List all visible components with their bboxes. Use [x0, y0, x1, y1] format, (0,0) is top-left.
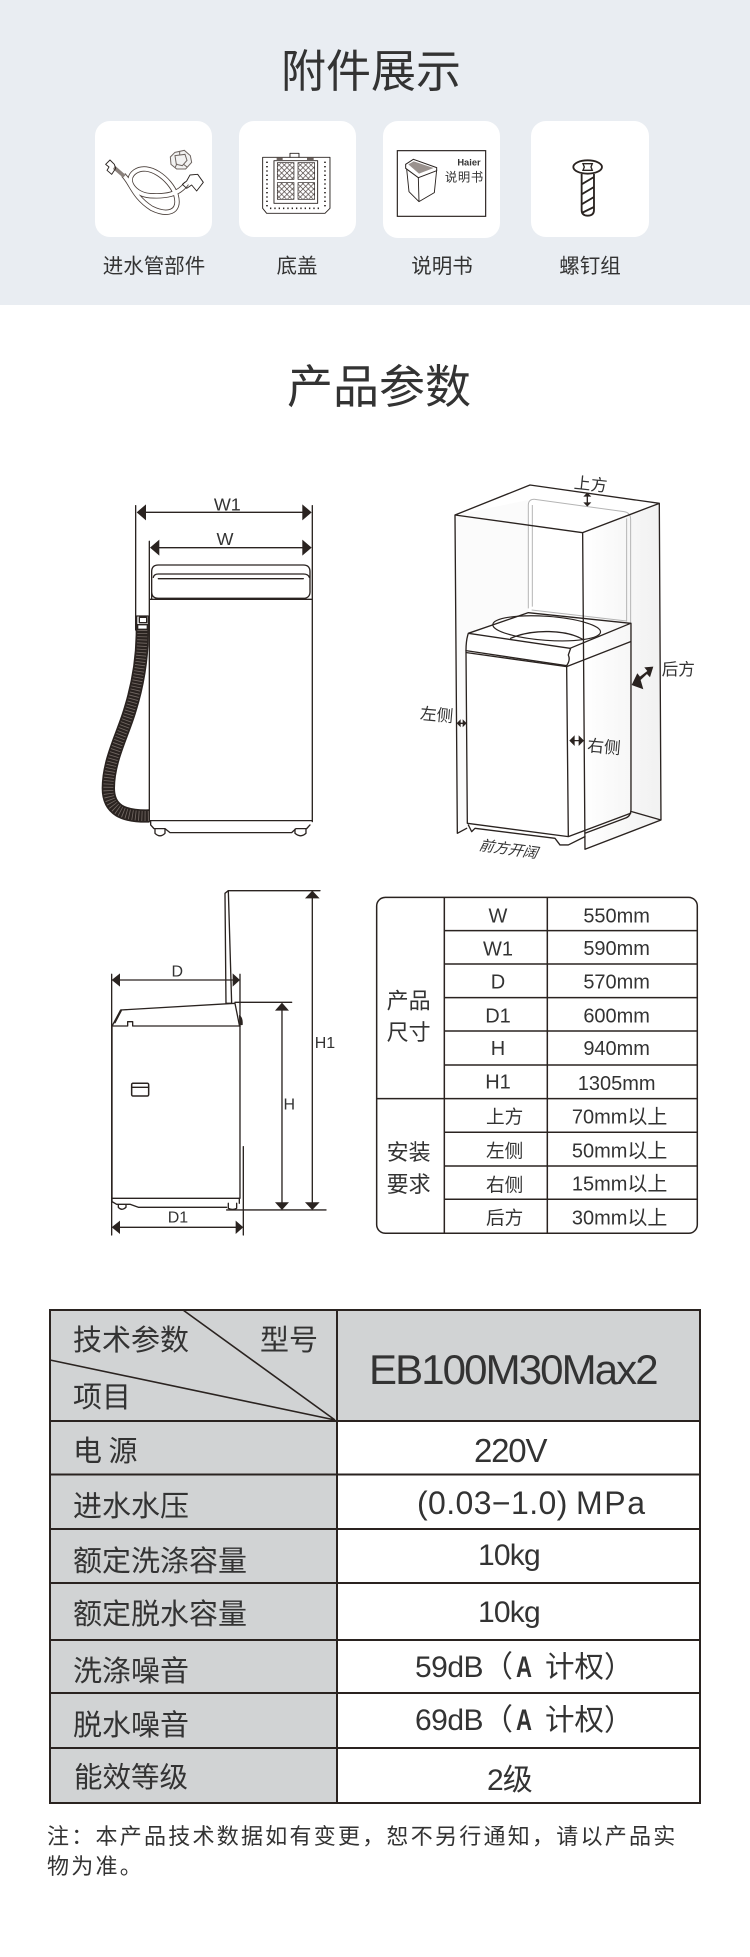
panel: accessories background — [0, 0, 750, 305]
header: model: 型号 — [260, 1317, 318, 1359]
note: 注：本产品技术数据如有变更，恕不另行通知，请以产品实 — [47, 1819, 678, 1851]
rows: keys: 右侧 — [486, 1170, 523, 1197]
row: power: 电 源 — [73, 1428, 138, 1470]
row: spin noise — [73, 1695, 634, 1744]
text: left clearance: 左侧 — [419, 700, 454, 727]
row: power — [73, 1428, 547, 1470]
rows: values: 15mm以上 — [572, 1173, 667, 1196]
row: water pressure: 进水水压 — [73, 1483, 189, 1525]
row: spin noise: 计权） — [545, 1697, 634, 1739]
text: H: H — [284, 1096, 295, 1113]
row: energy grade: 能效等级 — [74, 1755, 188, 1796]
rows: keys: 左侧 — [486, 1136, 523, 1163]
text: rear clearance: 后方 — [662, 656, 695, 680]
rows: keys: H — [491, 1038, 505, 1060]
diagram: installation clearance perspective — [419, 469, 695, 863]
row: wash noise: （ — [483, 1642, 513, 1686]
icon: bottom cover — [263, 153, 330, 213]
row: water pressure — [73, 1483, 647, 1525]
label: screw set: 螺钉组 — [559, 249, 621, 279]
rows: values: 550mm — [583, 906, 650, 928]
row: wash noise: 洗涤噪音 — [73, 1648, 189, 1690]
icon: manual — [397, 151, 486, 216]
rows: keys: 后方 — [486, 1204, 523, 1231]
rows: keys: 上方 — [486, 1103, 523, 1130]
row: wash noise — [73, 1642, 634, 1690]
group label: product size: 产品 — [387, 983, 431, 1015]
label: bottom cover: 底盖 — [276, 249, 318, 279]
icon: screw — [573, 160, 602, 216]
diagram: side view with D H dimensions — [112, 891, 335, 1235]
card: bottom cover — [239, 121, 356, 237]
rows: keys: D — [491, 971, 505, 993]
text: right clearance: 右侧 — [586, 732, 622, 759]
rows: keys: H1 — [485, 1071, 511, 1093]
rows: keys: W — [489, 906, 508, 928]
text: D1: D1 — [168, 1210, 188, 1227]
row: spin capacity — [73, 1591, 540, 1633]
group label: install: 安装 — [387, 1135, 431, 1167]
arrows — [458, 495, 587, 741]
rows: values: 50mm以上 — [572, 1139, 667, 1162]
rows: values: 590mm — [583, 938, 650, 960]
row: wash capacity: 额定洗涤容量 — [73, 1538, 247, 1580]
header: parameter: 技术参数 — [73, 1317, 189, 1359]
icon: inlet hose — [106, 150, 203, 212]
text: Haier: Haier — [457, 158, 481, 168]
label: manual: 说明书 — [411, 249, 473, 279]
text: W1: W1 — [214, 495, 241, 515]
text: manual label: 说明书 — [445, 168, 484, 186]
row: spin capacity: 10kg — [478, 1596, 540, 1629]
table: technical parameters — [50, 1310, 700, 1803]
group label: install line 2: 要求 — [387, 1167, 431, 1199]
rows: keys: D1 — [485, 1005, 511, 1027]
note — [47, 1819, 678, 1881]
rows: values — [572, 906, 667, 1230]
diagram: front view with W and W1 — [108, 495, 312, 836]
row: wash capacity: 10kg — [478, 1539, 540, 1572]
row: spin capacity: 额定脱水容量 — [73, 1591, 247, 1633]
row: water pressure: (0.03−1.0) — [417, 1485, 568, 1521]
row: spin noise: A — [516, 1704, 532, 1737]
label: inlet hose: 进水管部件 — [103, 249, 205, 279]
header: model number: EB100M30Max2 — [369, 1346, 657, 1393]
row: wash noise: A — [516, 1651, 532, 1684]
row: wash capacity — [73, 1538, 540, 1580]
row: spin noise: （ — [483, 1695, 513, 1739]
rows: values: 940mm — [583, 1038, 650, 1060]
card: manual — [383, 121, 500, 238]
row: wash noise: 计权） — [545, 1644, 634, 1686]
row: spin noise: 脱水噪音 — [73, 1702, 189, 1744]
table: size and installation — [377, 897, 697, 1233]
rows: values: 1305mm — [578, 1073, 656, 1095]
text: W: W — [216, 529, 233, 549]
rows: values: 570mm — [583, 971, 650, 993]
text: H1: H1 — [315, 1035, 335, 1052]
row: wash noise: 59dB — [415, 1651, 483, 1684]
text: top clearance: 上方 — [573, 469, 609, 497]
rows: keys: W1 — [483, 939, 513, 961]
header: item: 项目 — [73, 1374, 131, 1416]
row: spin noise: 69dB — [415, 1704, 483, 1737]
rows: values: 600mm — [583, 1006, 650, 1028]
rows: values: 30mm以上 — [572, 1207, 667, 1230]
lid — [528, 499, 631, 623]
rows: keys — [483, 906, 523, 1231]
text: front open: 前方开阔 — [476, 835, 544, 863]
card: inlet hose — [95, 121, 212, 237]
row: energy grade — [74, 1755, 532, 1799]
row: water pressure: MPa — [576, 1485, 647, 1521]
row: power: 220V — [474, 1432, 547, 1469]
text: D: D — [172, 964, 183, 981]
heading: product parameters: 产品参数 — [287, 351, 471, 417]
heading: accessories: 附件展示 — [281, 35, 461, 100]
hose — [108, 630, 149, 816]
group label: product size line 2: 尺寸 — [387, 1015, 431, 1047]
note: 物为准。 — [47, 1849, 144, 1881]
row: energy grade: 2级 — [487, 1755, 532, 1799]
card: screw set — [531, 121, 649, 237]
rows: values: 70mm以上 — [572, 1106, 667, 1129]
washer — [466, 613, 631, 666]
